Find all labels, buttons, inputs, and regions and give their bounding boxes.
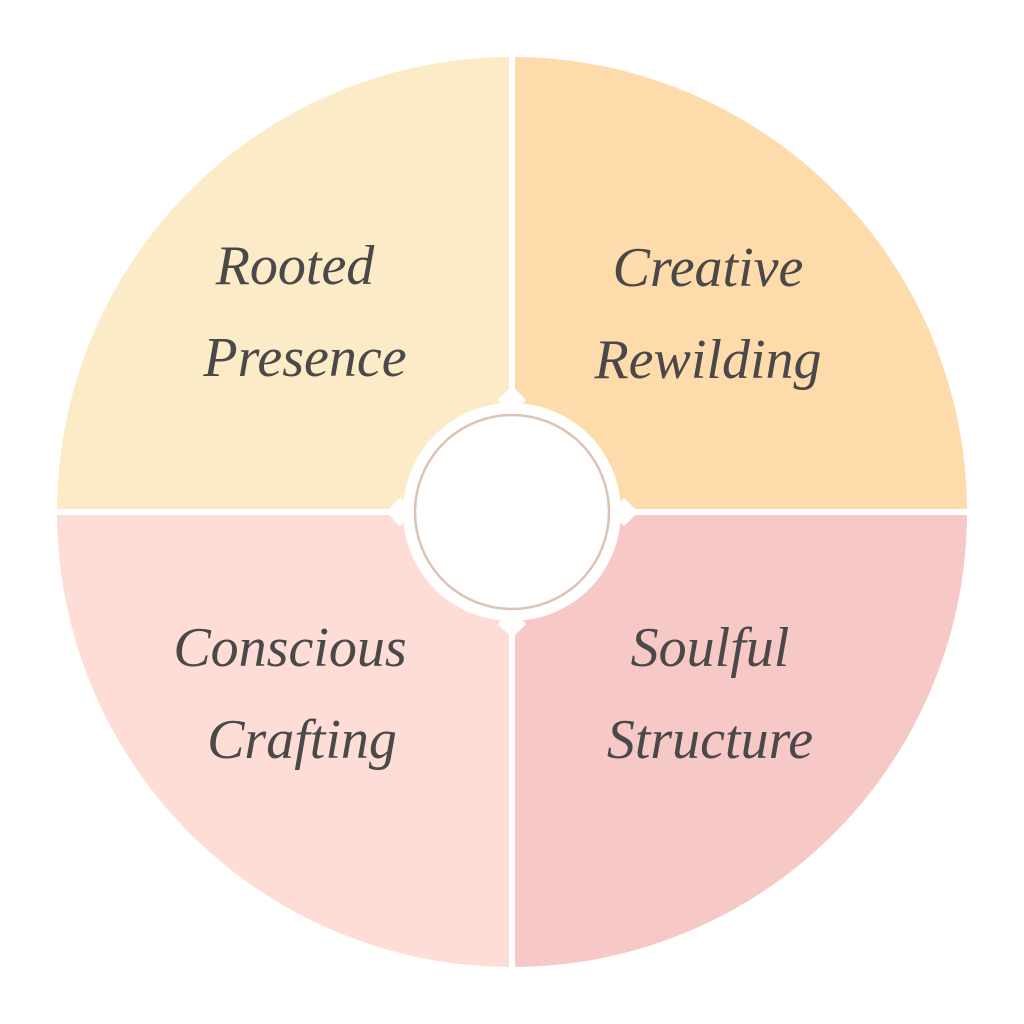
- text: soulful structure: [607, 617, 813, 771]
- text: creative rewilding: [593, 237, 822, 391]
- panel: soulful structure: [515, 515, 967, 967]
- center circle: [386, 386, 638, 638]
- panel: creative rewilding: [515, 57, 967, 509]
- text: rooted presence: Presence: [202, 327, 407, 389]
- text: soulful structure: Soulful: [631, 617, 789, 679]
- panel: rooted presence: [57, 57, 509, 509]
- text: rooted presence: [202, 235, 407, 389]
- text: rooted presence: Rooted: [215, 235, 375, 297]
- text: conscious crafting: Crafting: [207, 709, 397, 771]
- text: soulful structure: Structure: [607, 709, 813, 771]
- text: creative rewilding: Rewilding: [593, 329, 822, 391]
- panel: conscious crafting: [57, 515, 509, 967]
- text: creative rewilding: Creative: [613, 237, 803, 299]
- text: conscious crafting: [173, 617, 407, 771]
- text: conscious crafting: Conscious: [173, 617, 407, 679]
